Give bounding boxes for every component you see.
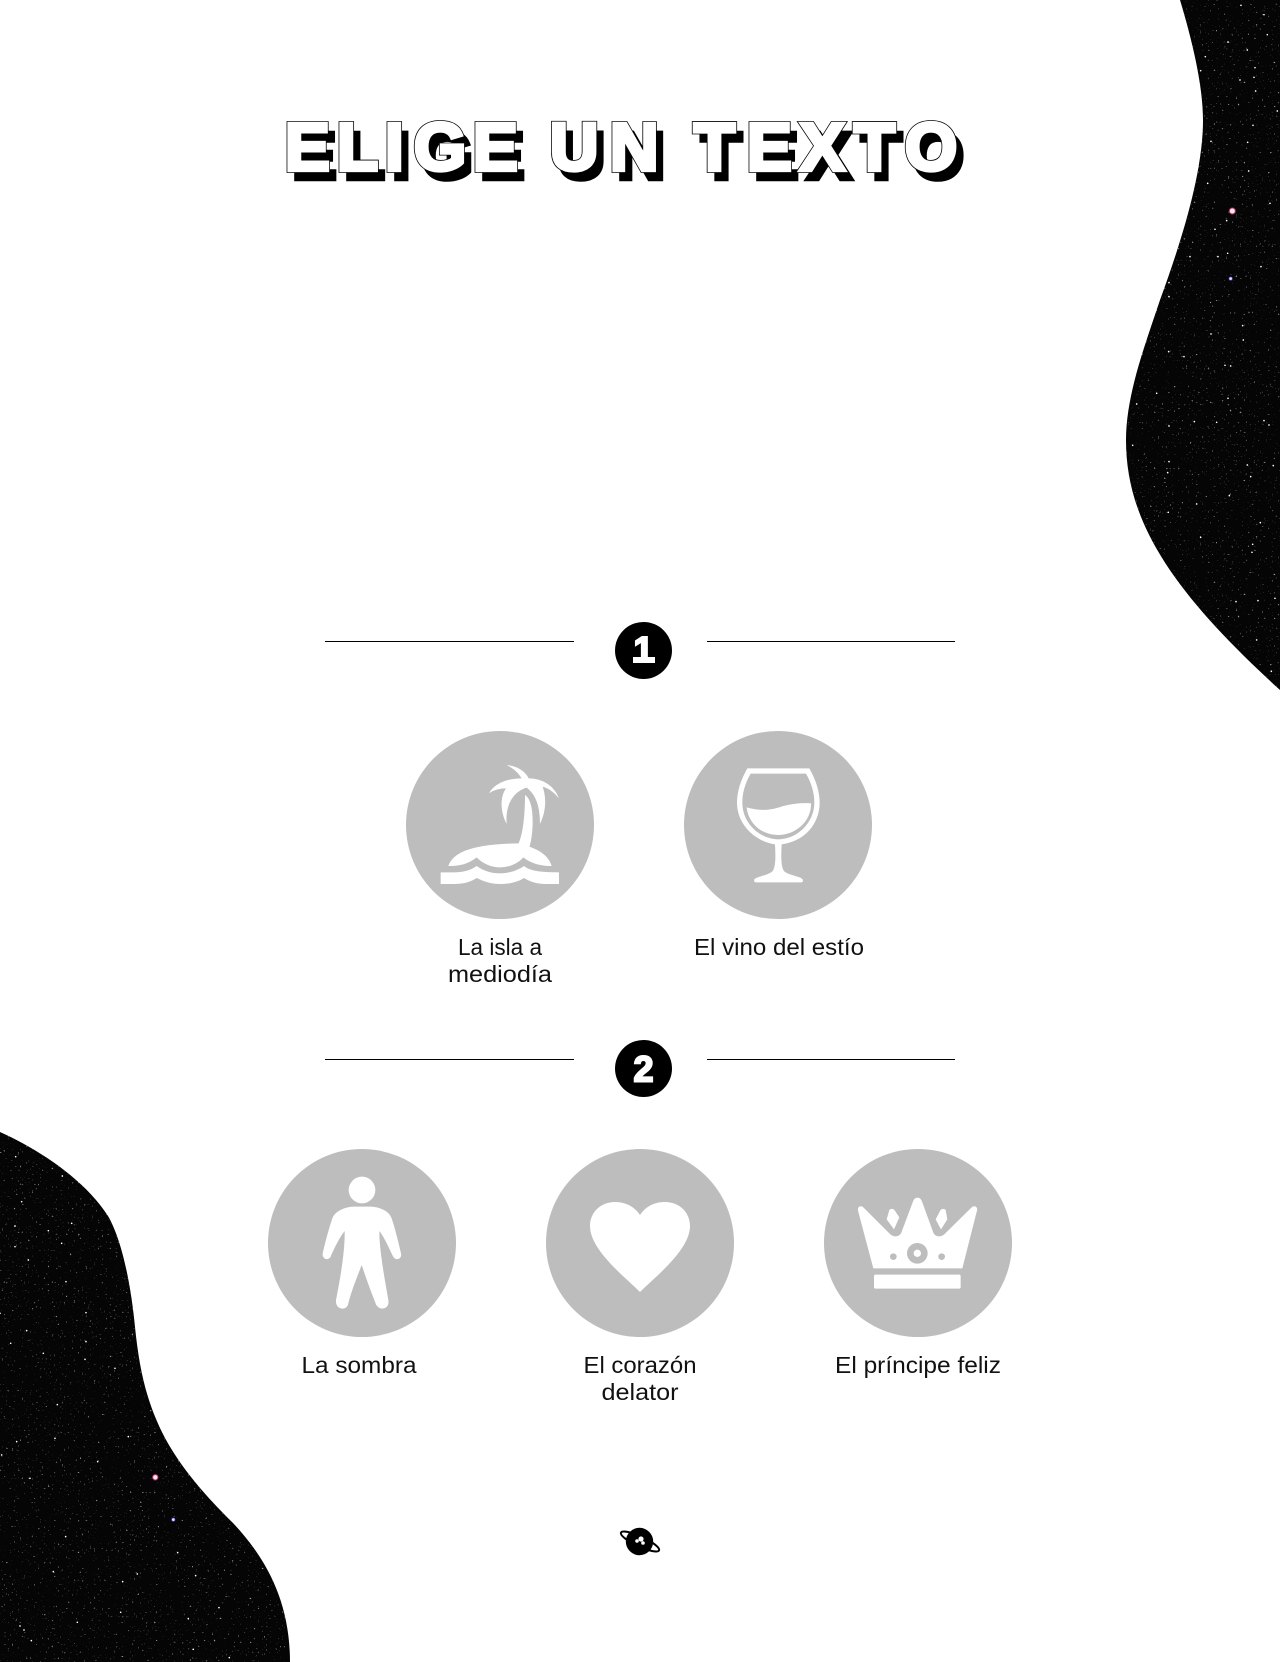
label: La isla a <box>458 934 542 960</box>
badge: number 1 <box>615 622 672 679</box>
label: El príncipe feliz <box>835 1352 1001 1378</box>
badge: number 2 <box>615 1040 672 1097</box>
title: ELIGE UN TEXTO <box>285 110 957 185</box>
title: ELIGE UN TEXTO <box>285 110 957 185</box>
icon: wine glass <box>737 768 820 882</box>
option: La isla a mediodía <box>406 731 594 987</box>
badge: number 2: 2 <box>633 1048 654 1090</box>
starry blob: bottom left <box>0 1120 300 1662</box>
icon: palm island <box>441 765 559 884</box>
icon: heart <box>590 1202 690 1292</box>
option: El príncipe feliz <box>824 1149 1012 1378</box>
option: El vino del estío <box>684 731 872 960</box>
badge: number 1: 1 <box>633 629 654 670</box>
section 1 header <box>325 622 955 679</box>
label: El corazón <box>584 1352 696 1378</box>
icon: planet logo <box>619 1528 661 1555</box>
label: mediodía <box>448 961 552 987</box>
label: delator <box>602 1379 679 1405</box>
option: El corazón delator <box>546 1149 734 1405</box>
option: La sombra <box>268 1149 456 1378</box>
icon: crown <box>858 1198 977 1289</box>
starry blob: top right <box>1126 0 1280 690</box>
title: ELIGE UN TEXTO <box>292 119 964 194</box>
icon: person <box>323 1177 401 1309</box>
label: El vino del estío <box>694 934 864 960</box>
label: La sombra <box>302 1352 417 1378</box>
section 2 header <box>325 1040 955 1097</box>
